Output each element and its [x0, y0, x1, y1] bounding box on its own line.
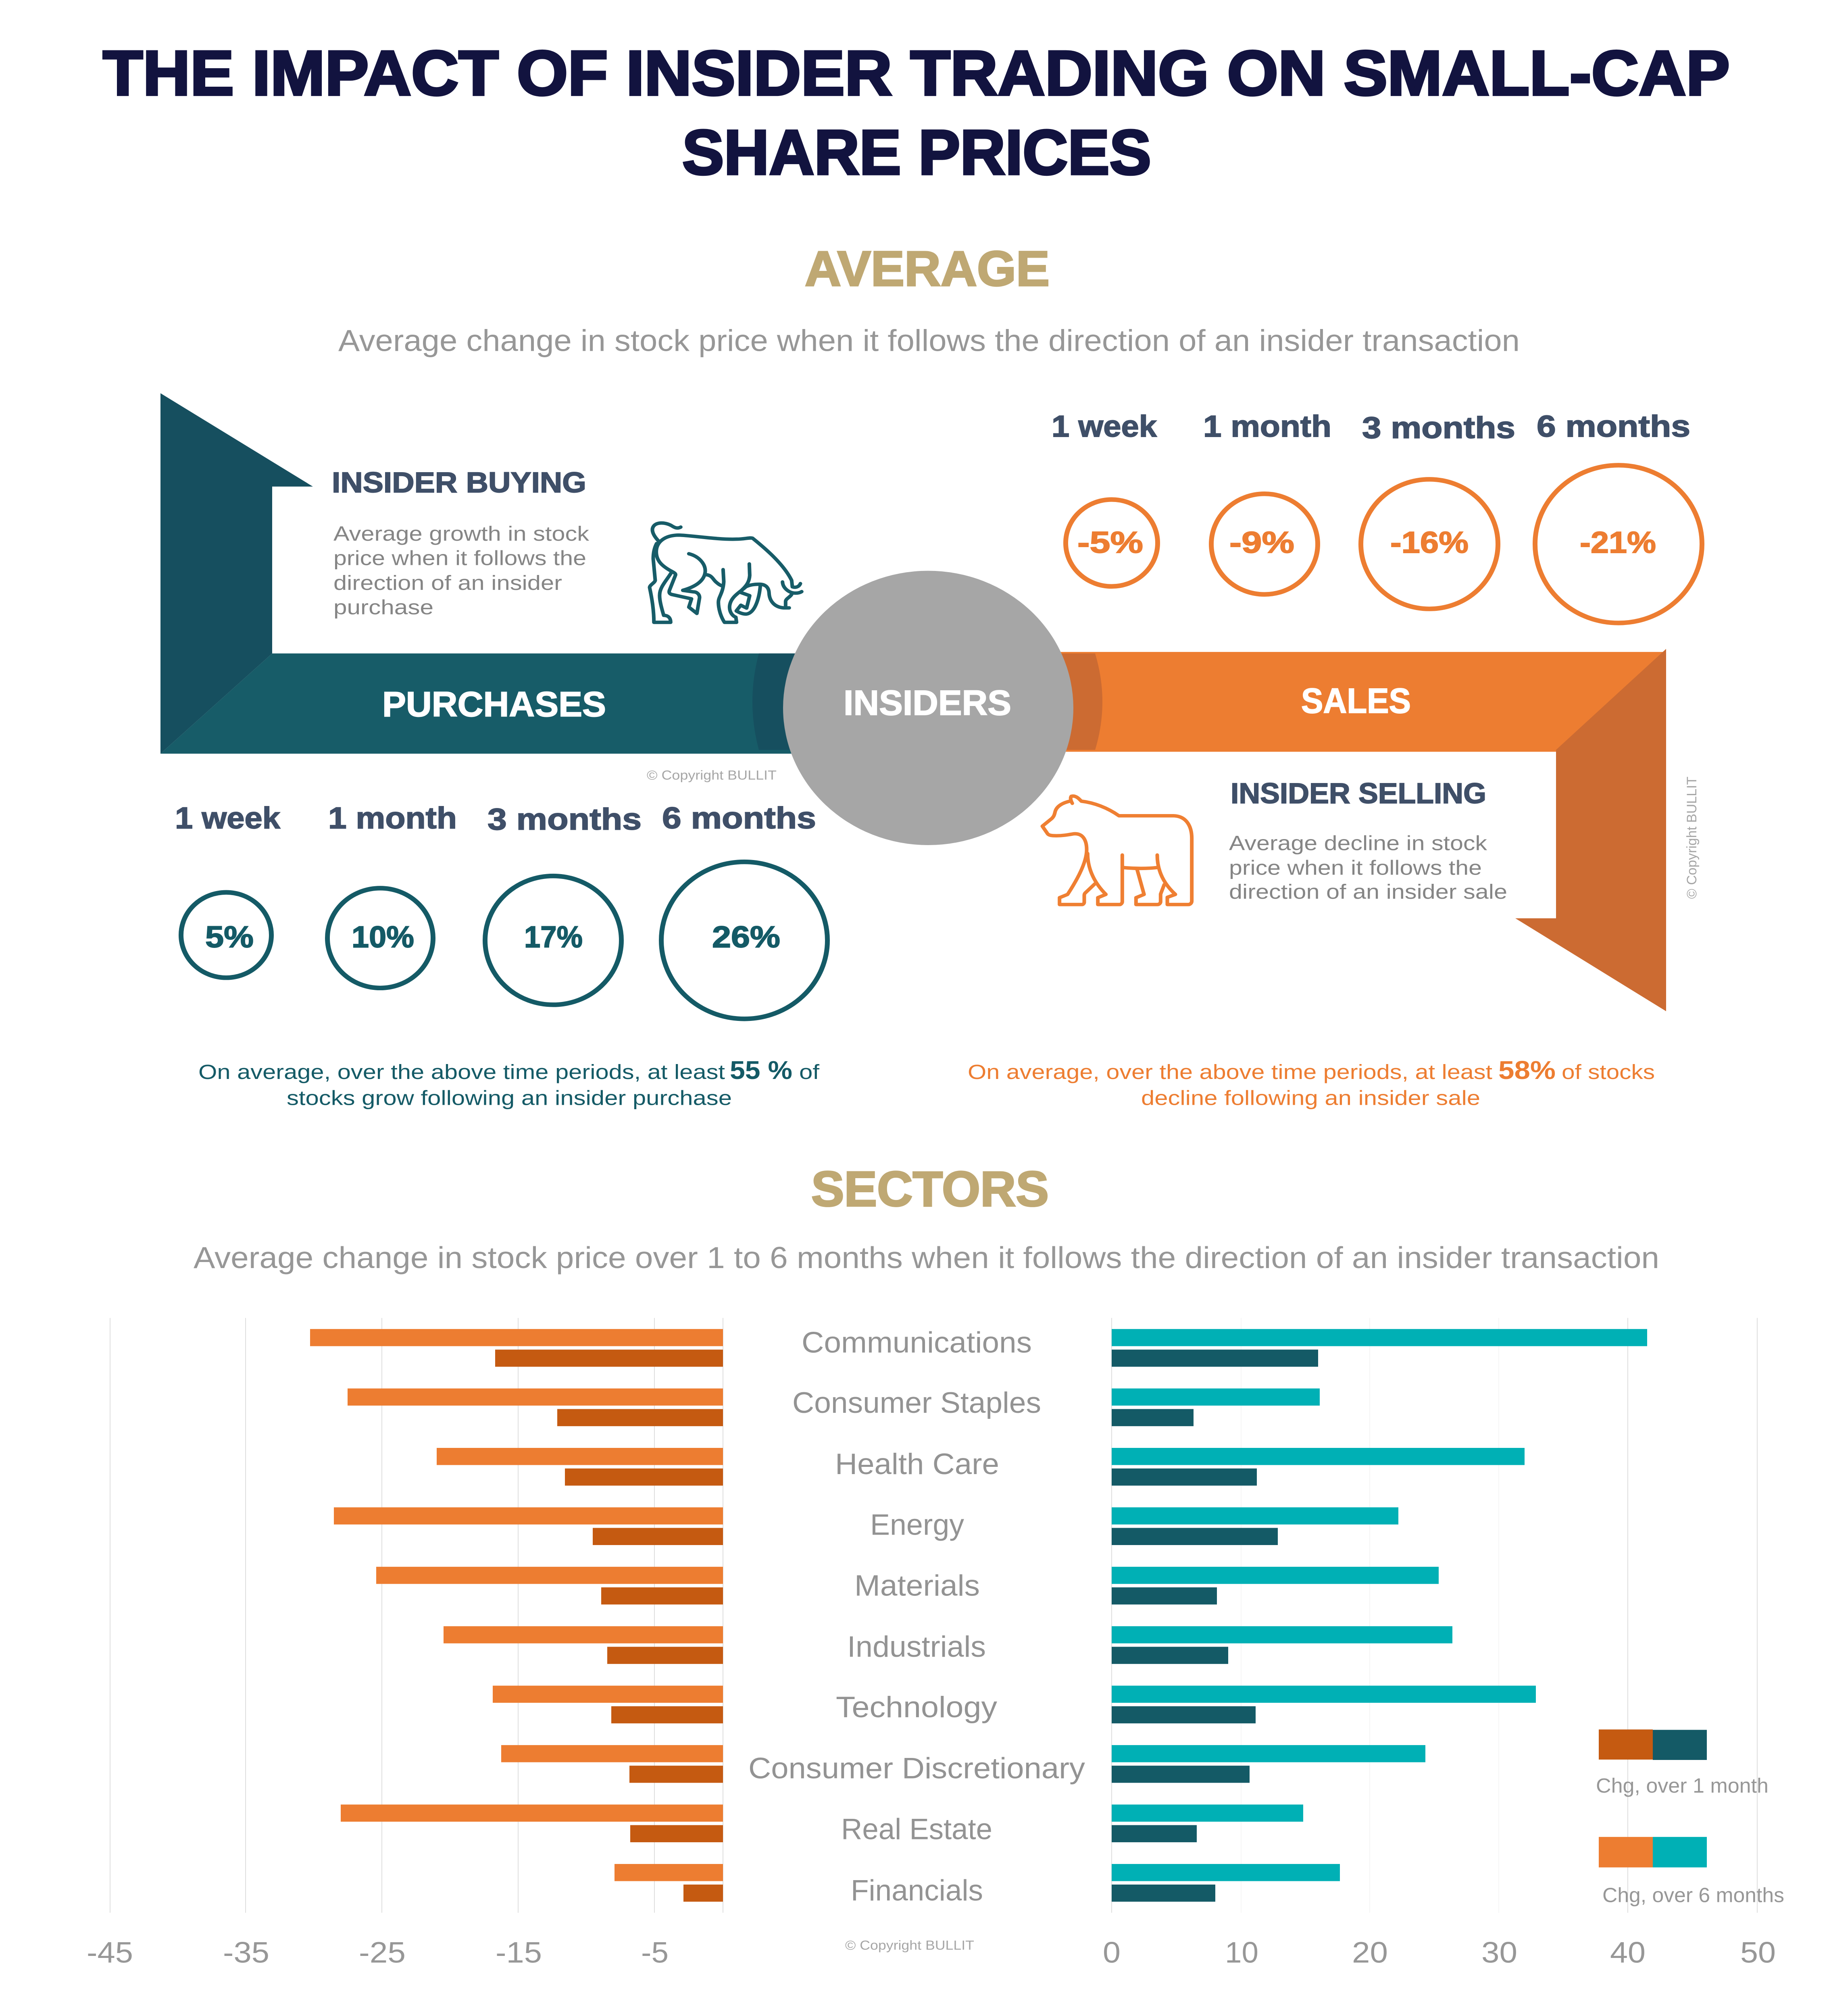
- purchases label: PURCHASES: [382, 685, 606, 724]
- period labels: 3 months: [487, 802, 642, 836]
- insider buying description: price when it follows the: [333, 547, 586, 570]
- subtitle: average: Average change in stock price when it follows the direction of an insider transaction: [338, 324, 1520, 358]
- circle: 1 week purchases: 5%: [205, 920, 254, 954]
- circle: 1 week purchases: [181, 892, 271, 978]
- panel: insider buying arrow: [160, 393, 847, 754]
- insider selling description: Average decline in stock: [1229, 832, 1487, 855]
- callout: sales summary: of stocks: [1562, 1061, 1655, 1084]
- period labels: 6 months: [1537, 410, 1690, 443]
- legend: change over 1 month: [1596, 1729, 1769, 1797]
- callout: sales summary: 58%: [1498, 1056, 1556, 1085]
- axis labels: positive: 0: [1103, 1936, 1121, 1969]
- copyright: purchases: © Copyright BULLIT: [647, 768, 777, 783]
- insider buying description: direction of an insider: [333, 571, 562, 595]
- axis labels: positive: 10: [1225, 1936, 1258, 1969]
- axis labels: negative: [87, 1936, 669, 1969]
- title: SHARE PRICES: [682, 117, 1151, 188]
- insider buying heading: INSIDER BUYING: [332, 466, 586, 498]
- period labels: [1052, 410, 1690, 445]
- circle: 6 months sales: -21%: [1580, 526, 1656, 560]
- bar shadow near circle: [752, 654, 847, 750]
- period labels: [175, 801, 816, 836]
- subtitle: sectors: Average change in stock price over 1 to 6 months when it follows the direction of an insider transaction: [194, 1241, 1659, 1275]
- panel: insider selling arrow: [1008, 649, 1666, 1011]
- axis labels: negative: -5: [641, 1936, 669, 1969]
- heading: sectors: SECTORS: [811, 1161, 1049, 1216]
- insider buying description: Average growth in stock: [333, 522, 590, 546]
- axis labels: positive: 20: [1352, 1936, 1388, 1969]
- copyright: vertical: © Copyright BULLIT: [1684, 777, 1700, 899]
- sector labels: Financials: [851, 1874, 983, 1907]
- period labels: 6 months: [662, 801, 816, 835]
- axis labels: positive: 50: [1740, 1936, 1776, 1969]
- insider selling description: [1229, 832, 1507, 904]
- period labels: 1 week: [175, 801, 281, 835]
- circle: 1 week sales: [1066, 500, 1158, 586]
- circle: 3 months sales: [1361, 479, 1498, 609]
- axis labels: positive: [1103, 1936, 1776, 1969]
- title: [103, 38, 1730, 188]
- panel: sales periods: [1052, 410, 1702, 623]
- insider buying description: [333, 522, 590, 619]
- legend: change over 6 months: Chg, over 6 months: [1602, 1884, 1784, 1907]
- period labels: 3 months: [1362, 411, 1515, 445]
- circle: 6 months purchases: 26%: [712, 920, 780, 954]
- callout: sales summary: [968, 1056, 1655, 1110]
- circle: 6 months purchases: [661, 862, 827, 1019]
- insiders circle: [783, 571, 1073, 845]
- circle: 6 months sales: [1535, 465, 1702, 623]
- upward arrow: [160, 393, 313, 754]
- bar shadow near circle: [1008, 654, 1102, 750]
- sector labels: Communications: [802, 1326, 1032, 1359]
- sector labels: [748, 1326, 1085, 1907]
- bar chart: purchases by sector: [1112, 1329, 1647, 1901]
- copyright: chart: © Copyright BULLIT: [845, 1938, 974, 1953]
- sector labels: Materials: [854, 1569, 980, 1602]
- sector labels: Consumer Staples: [792, 1386, 1041, 1420]
- circle: 1 week sales: -5%: [1077, 526, 1143, 560]
- insider selling description: direction of an insider sale: [1229, 881, 1507, 904]
- circle: 1 month purchases: [327, 888, 433, 988]
- sector labels: Consumer Discretionary: [748, 1752, 1085, 1785]
- sector labels: Industrials: [847, 1630, 986, 1663]
- circle: 3 months purchases: [485, 876, 621, 1005]
- circle: 3 months purchases: 17%: [524, 920, 583, 954]
- callout: purchases summary: stocks grow following an insider purchase: [287, 1087, 732, 1110]
- downward arrow: [1515, 649, 1666, 1011]
- period labels: 1 week: [1052, 410, 1157, 443]
- circle: 1 month purchases: 10%: [352, 920, 414, 954]
- period labels: 1 month: [328, 801, 457, 835]
- axis labels: negative: -35: [223, 1936, 269, 1969]
- circle: 3 months sales: -16%: [1390, 526, 1469, 560]
- insiders circle: INSIDERS: [844, 683, 1011, 722]
- title: THE IMPACT OF INSIDER TRADING ON SMALL-CAP: [103, 38, 1730, 108]
- panel: purchases periods: [175, 801, 827, 1019]
- legend: change over 1 month: Chg, over 1 month: [1596, 1774, 1769, 1797]
- axis labels: negative: -15: [496, 1936, 542, 1969]
- sector labels: Technology: [836, 1691, 997, 1724]
- purchases bar: [160, 654, 847, 754]
- callout: purchases summary: of: [799, 1061, 819, 1084]
- circle: 1 month sales: -9%: [1229, 526, 1294, 560]
- callout: sales summary: On average, over the above time periods, at least: [968, 1061, 1492, 1084]
- insider selling description: price when it follows the: [1229, 856, 1482, 879]
- circle: 1 month sales: [1211, 494, 1318, 594]
- callout: purchases summary: 55 %: [730, 1056, 792, 1085]
- callout: purchases summary: On average, over the above time periods, at least: [198, 1061, 725, 1084]
- axis labels: positive: 30: [1481, 1936, 1517, 1969]
- insider buying description: purchase: [333, 596, 433, 619]
- axis labels: negative: -25: [359, 1936, 406, 1969]
- sector labels: Real Estate: [841, 1812, 992, 1846]
- sector labels: Health Care: [835, 1447, 999, 1481]
- axis labels: positive: 40: [1610, 1936, 1646, 1969]
- legend: change over 6 months: [1599, 1837, 1784, 1907]
- callout: purchases summary: [198, 1056, 819, 1110]
- bar chart: sales by sector: [310, 1329, 723, 1901]
- callout: sales summary: decline following an insider sale: [1141, 1087, 1480, 1110]
- axis labels: negative: -45: [87, 1936, 133, 1969]
- period labels: 1 month: [1203, 410, 1331, 443]
- sales label: SALES: [1301, 681, 1411, 721]
- insider selling heading: INSIDER SELLING: [1231, 777, 1486, 810]
- sector labels: Energy: [870, 1508, 964, 1541]
- icon: bear: [1042, 796, 1192, 904]
- heading: average: AVERAGE: [805, 241, 1050, 296]
- sales bar: [1008, 652, 1666, 752]
- icon: bull: [650, 523, 802, 622]
